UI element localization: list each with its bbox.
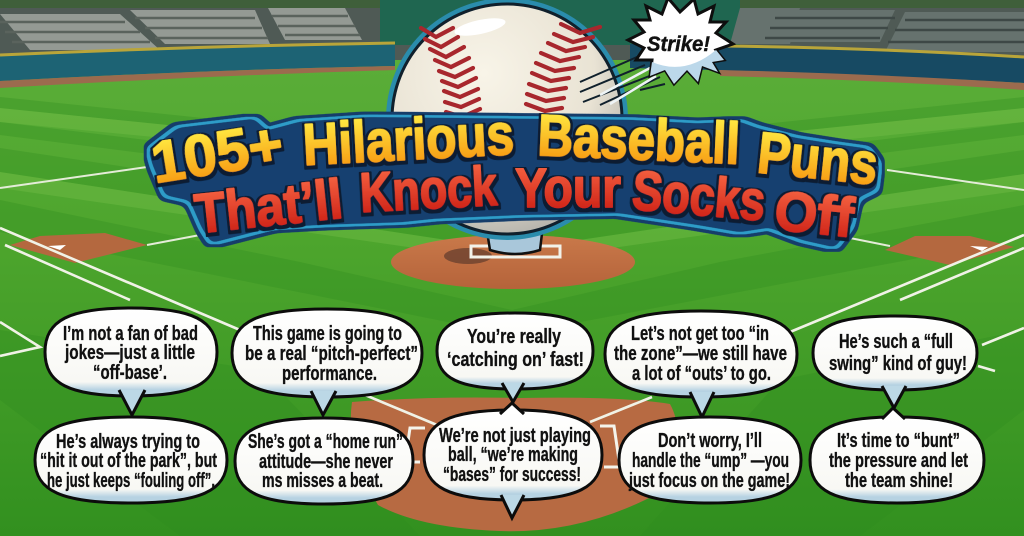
title line 2: Socks <box>630 158 768 233</box>
bubble 1 <box>45 308 217 415</box>
icon: strike burst <box>628 0 733 84</box>
bubble 10: the pressure and let <box>829 450 968 472</box>
bubble 1: I’m not a fan of bad <box>63 323 198 345</box>
bubble 1: “off-base’. <box>93 362 167 384</box>
title line 2: Off <box>772 178 857 249</box>
bubble 6: he just keeps “fouling off”. <box>47 470 215 492</box>
bubble 10: the team shine! <box>845 470 953 492</box>
bubble 8: “bases” for success! <box>443 464 581 486</box>
title line 1: 105+ <box>147 111 287 196</box>
bubble 2: be a real “pitch-perfect” <box>245 343 418 365</box>
title line 2: Your <box>515 156 621 219</box>
bubble 5 <box>813 316 977 408</box>
title line 2: That’ll <box>192 167 345 245</box>
bubble 2 <box>232 309 422 415</box>
title line 1: Hilarious <box>301 102 515 178</box>
burst label: Strike! <box>647 33 710 56</box>
bubble 3: You’re really <box>467 326 562 348</box>
bubble 7: ms misses a beat. <box>262 470 383 492</box>
title line 1 <box>147 102 881 197</box>
bubble 5: He’s such a “full <box>839 331 953 353</box>
bubble 1: jokes—just a little <box>64 342 195 364</box>
title line 2: Knock <box>358 154 499 224</box>
bubble 9: handle the “ump” —you <box>632 450 789 472</box>
title line 1: Puns <box>755 120 881 197</box>
bubble 4: a lot of “outs’ to go. <box>632 363 771 385</box>
title banner <box>147 102 881 249</box>
bubble 10: It’s time to “bunt” <box>837 430 960 452</box>
baseball stitches <box>421 24 600 117</box>
bubble 4 <box>605 311 797 417</box>
bubble 4: Let’s not get too “in <box>631 323 769 345</box>
bubble 7: attitude—she never <box>259 451 393 473</box>
bubble 2: performance. <box>282 363 377 385</box>
base paths and dirt <box>0 228 1024 531</box>
bubble 9 <box>619 417 801 503</box>
bubble 4: the zone”—we still have <box>614 343 787 365</box>
bubble 6: “hit it out of the park”, but <box>40 450 217 472</box>
bubble 8: ball, “we’re making <box>448 444 578 466</box>
bubble 10 <box>810 408 984 503</box>
icon: giant baseball on tee <box>386 0 628 264</box>
bubble 8 <box>424 403 602 518</box>
bubble 3: ‘catching on’ fast! <box>447 349 584 371</box>
bubble 7: She’s got a “home run” <box>248 431 403 453</box>
bubble 5: swing” kind of guy! <box>829 353 967 375</box>
bubble 3 <box>437 313 593 402</box>
title line 1: Baseball <box>536 103 741 177</box>
bubble 8: We’re not just playing <box>439 425 591 447</box>
bubble 6: He’s always trying to <box>56 431 200 453</box>
speed lines <box>580 57 665 105</box>
bubble 9: Don’t worry, I’ll <box>658 430 762 452</box>
bubble 7 <box>235 418 413 504</box>
bubble 9: just focus on the game! <box>628 470 790 492</box>
title line 2 <box>192 154 857 249</box>
bubble 6 <box>35 417 227 503</box>
bubble 2: This game is going to <box>253 323 402 345</box>
